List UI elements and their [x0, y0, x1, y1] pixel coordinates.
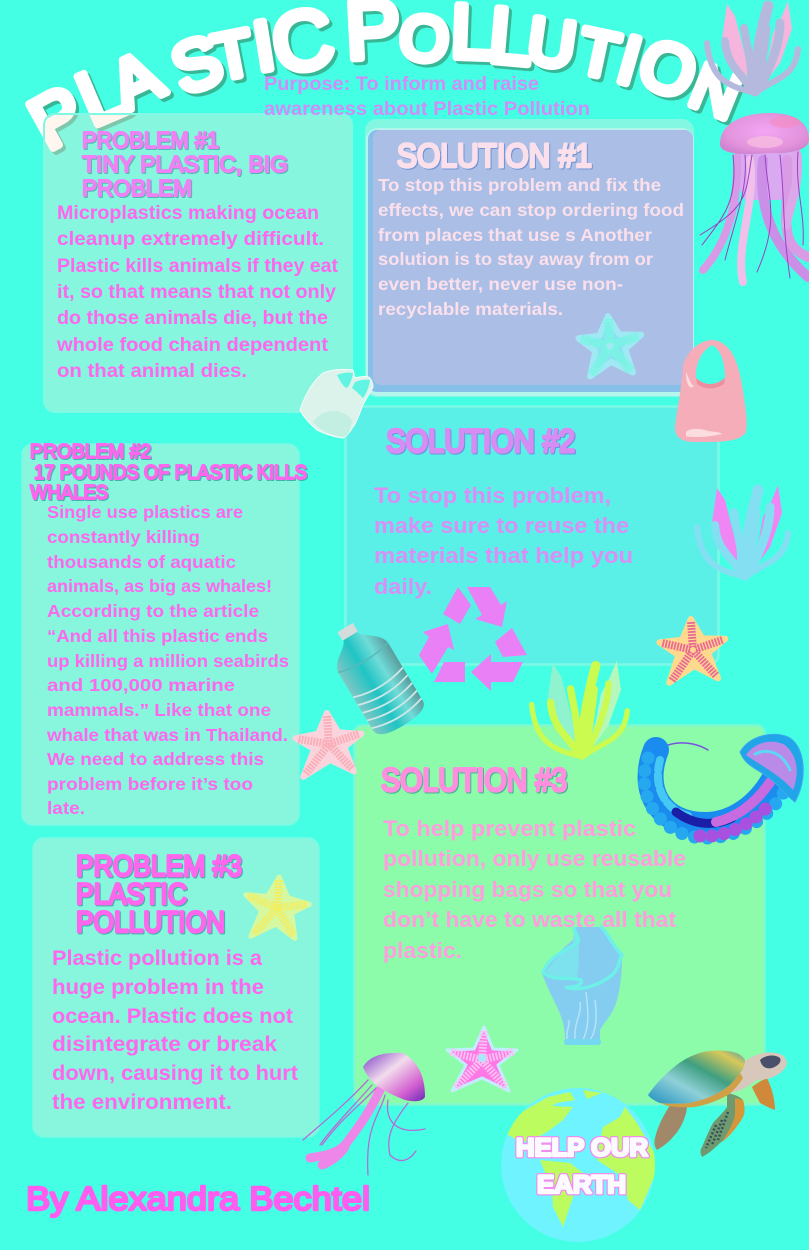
heading: solution 1: SOLUTION #1: [397, 137, 592, 174]
text: problem 3 body: down, causing it to hurt: [52, 1062, 298, 1085]
heading: problem 3: PLASTIC: [76, 878, 187, 911]
icon: blue plastic bag: [542, 926, 622, 1045]
text: solution 1 body: from places that use s Another: [378, 225, 652, 245]
icon: earth globe: [501, 1088, 660, 1242]
title: O: [397, 2, 452, 76]
heading: problem 1: TINY PLASTIC, BIG: [82, 151, 288, 177]
icon: white plastic bag: [300, 369, 373, 438]
icon: blue crescent jellyfish: [644, 734, 803, 838]
title: A: [98, 35, 174, 126]
title: I: [248, 6, 280, 86]
text: problem 3 body: Plastic pollution is a: [52, 947, 262, 970]
icon: pink starfish: [294, 711, 364, 777]
text: problem 1 body: cleanup extremely difficult.: [57, 229, 324, 250]
panel: problem 2: [22, 444, 299, 825]
text: solution 3 body: don’t have to waste all that: [383, 907, 677, 932]
panel: solution 1: [365, 119, 694, 397]
badge text: help our earth: [516, 1134, 648, 1199]
heading: solution 3: SOLUTION #3: [381, 762, 567, 798]
text: problem 1 body: whole food chain dependent: [56, 335, 329, 356]
text: problem 2 body: “And all this plastic ends: [47, 626, 268, 646]
panel: problem 1: [44, 114, 352, 412]
icon: water bottle: [320, 613, 429, 740]
title: I: [610, 21, 649, 100]
icon: pink plastic bag: [675, 340, 747, 442]
text: problem 3 body: the environment.: [52, 1091, 232, 1114]
text: problem 2 body: constantly killing: [47, 527, 200, 547]
text: solution 1 body: recyclable materials.: [378, 299, 563, 319]
text: solution 3 body: shopping bags so that you: [383, 877, 672, 902]
text: problem 3 body: disintegrate or break: [52, 1033, 277, 1056]
icon: pink jellyfish: [700, 113, 809, 282]
text: problem 2 body: whale that was in Thailand.: [46, 725, 288, 745]
text: solution 3 body: plastic.: [383, 938, 462, 963]
heading: problem 1: PROBLEM: [82, 175, 192, 201]
purpose text: Purpose: To inform and raise: [264, 74, 539, 95]
text: problem 3 body: huge problem in the: [52, 976, 264, 999]
text: problem 1 body: [56, 203, 339, 382]
text: solution 2 body: materials that help you: [374, 543, 633, 568]
heading: problem 2: [30, 440, 307, 504]
badge text: help our earth: EARTH: [537, 1171, 626, 1199]
icon: blue starfish: [577, 314, 644, 377]
title: T: [207, 16, 259, 94]
text: solution 1 body: [378, 175, 684, 319]
text: solution 2 body: [374, 483, 633, 599]
title: U: [523, 3, 581, 82]
text: problem 2 body: mammals.” Like that one: [47, 700, 271, 720]
text: problem 1 body: it, so that means that not only: [57, 282, 336, 303]
text: problem 2 body: According to the article: [47, 601, 259, 621]
title: L: [65, 48, 138, 143]
text: solution 2 body: make sure to reuse the: [374, 513, 629, 538]
title: P: [16, 71, 98, 165]
text: problem 2 body: thousands of aquatic: [47, 552, 236, 572]
title: [16, 0, 751, 165]
text: problem 3 body: [52, 947, 298, 1114]
text: solution 2 body: To stop this problem,: [374, 483, 611, 508]
icon: lavender and pink coral: [697, 485, 788, 576]
text: problem 3 body: ocean. Plastic does not: [52, 1005, 293, 1028]
text: problem 2 body: problem before it’s too: [47, 774, 253, 794]
text: problem 1 body: on that animal dies.: [57, 361, 247, 382]
text: solution 1 body: To stop this problem and fix the: [378, 175, 661, 195]
icon: yellow-green coral: [532, 660, 627, 756]
heading: problem 2: WHALES: [30, 481, 108, 504]
panel: solution 3: [354, 726, 764, 1104]
panel: solution 2: [346, 406, 718, 664]
heading: problem 1: [82, 127, 288, 201]
purpose text: awareness about Plastic Pollution: [264, 99, 590, 120]
icon: pink and lavender coral: [707, 1, 798, 92]
text: solution 3 body: [383, 816, 686, 963]
text: problem 2 body: and 100,000 marine: [47, 675, 235, 695]
text: solution 3 body: To help prevent plastic: [383, 816, 636, 841]
text: problem 2 body: Single use plastics are: [47, 502, 243, 522]
text: problem 1 body: Plastic kills animals if they eat: [57, 256, 339, 277]
heading: problem 2: 17 POUNDS OF PLASTIC KILLS: [34, 461, 307, 484]
text: solution 3 body: pollution, only use reusable: [383, 846, 686, 871]
text: problem 2 body: up killing a million seabirds: [47, 651, 289, 671]
heading: problem 3: PROBLEM #3: [76, 850, 242, 883]
title: O: [629, 23, 707, 115]
icon: recycle symbol: [419, 587, 527, 691]
text: solution 1 body: effects, we can stop ordering food: [378, 200, 684, 220]
text: problem 2 body: [46, 502, 289, 818]
title: N: [681, 49, 751, 133]
badge text: help our earth: HELP OUR: [516, 1134, 648, 1162]
text: solution 1 body: solution is to stay away from or: [378, 249, 653, 269]
title: T: [572, 14, 625, 93]
icon: yellow starfish: [243, 875, 311, 940]
text: problem 1 body: Microplastics making ocean: [57, 203, 319, 224]
text: solution 2 body: daily.: [374, 574, 432, 599]
text: problem 1 body: do those animals die, but the: [57, 308, 328, 329]
icon: orange starfish: [658, 617, 728, 683]
panel: problem 3: [33, 838, 319, 1137]
heading: problem 2: PROBLEM #2: [30, 440, 151, 463]
heading: problem 1: PROBLEM #1: [82, 127, 219, 153]
heading: solution 2: SOLUTION #2: [386, 423, 575, 459]
text: problem 2 body: animals, as big as whales!: [47, 576, 272, 596]
byline: By Alexandra Bechtel: [26, 1180, 370, 1217]
icon: purple jellyfish: [303, 1053, 425, 1175]
icon: magenta starfish: [447, 1027, 517, 1091]
title: S: [161, 20, 232, 109]
text: problem 2 body: late.: [47, 798, 85, 818]
text: problem 2 body: We need to address this: [47, 749, 264, 769]
purpose text: [264, 74, 590, 120]
heading: problem 3: [76, 850, 242, 939]
icon: sea turtle: [648, 1050, 787, 1157]
heading: problem 3: POLLUTION: [76, 906, 225, 939]
text: solution 1 body: even better, never use non-: [378, 274, 623, 294]
